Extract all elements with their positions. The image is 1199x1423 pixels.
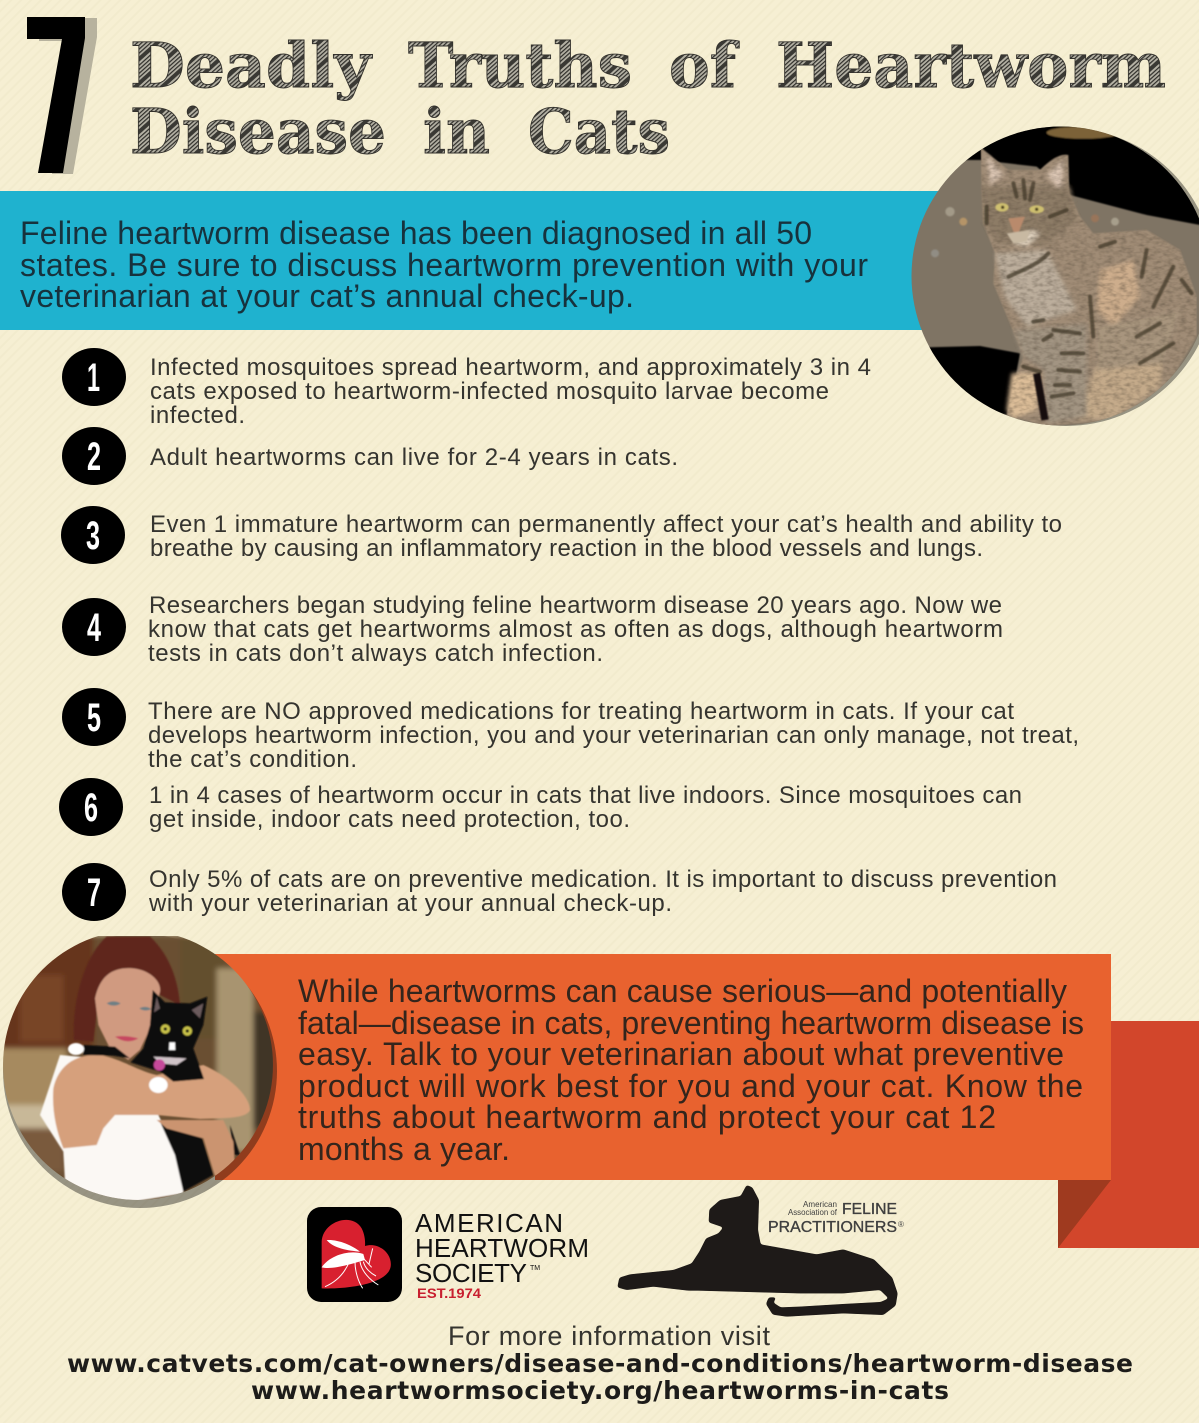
- item 2: Adult heartworms can live for 2-4 years in cats.: [150, 444, 678, 471]
- wordmark: American: [803, 1200, 837, 1209]
- intro text: veterinarian at your cat’s annual check-up.: [20, 278, 634, 314]
- wordmark: EST.1974: [417, 1285, 481, 1301]
- wordmark: [415, 1208, 589, 1301]
- callout text: months a year.: [298, 1131, 510, 1167]
- item 4: 4: [87, 606, 101, 650]
- item 5: 5: [87, 696, 101, 740]
- numbered list: [59, 348, 1079, 921]
- footer links: www.heartwormsociety.org/heartworms-in-cats: [251, 1376, 949, 1405]
- intro text: [20, 215, 868, 314]
- wordmark: HEARTWORM: [415, 1233, 589, 1263]
- item 2: 2: [87, 435, 101, 479]
- wordmark: FELINE: [842, 1201, 897, 1218]
- callout text: product will work best for you and your cat. Know the: [298, 1068, 1083, 1104]
- logo: American Heartworm Society: [307, 1207, 589, 1302]
- item 5: [62, 688, 1079, 773]
- item 1: cats exposed to heartworm-infected mosquito larvae become: [150, 378, 829, 405]
- item 1: infected.: [150, 402, 245, 429]
- item 7: with your veterinarian at your annual check-up.: [148, 890, 672, 917]
- title: Heartworm: [776, 29, 1166, 102]
- callout text: While heartworms can cause serious—and potentially: [298, 973, 1067, 1009]
- wordmark: Association of: [788, 1208, 838, 1217]
- callout text: easy. Talk to your veterinarian about what preventive: [298, 1036, 1064, 1072]
- item 3: breathe by causing an inflammatory reaction in the blood vessels and lungs.: [150, 535, 983, 562]
- title: [130, 29, 1166, 168]
- item 4: tests in cats don’t always catch infection.: [148, 640, 603, 667]
- item 5: the cat’s condition.: [148, 746, 357, 773]
- item 2: [62, 427, 678, 485]
- title: Truths: [408, 29, 632, 102]
- item 5: There are NO approved medications for treating heartworm in cats. If your cat: [148, 698, 1014, 725]
- footer links: For more information visit: [448, 1321, 770, 1351]
- item 3: Even 1 immature heartworm can permanently affect your cat’s health and ability to: [150, 511, 1062, 538]
- item 3: [61, 506, 1062, 564]
- icon: heart and mosquito: [307, 1207, 402, 1302]
- item 7: 7: [87, 871, 101, 915]
- item 6: [59, 778, 1022, 836]
- wordmark: TM: [530, 1265, 540, 1272]
- item 3: 3: [86, 514, 100, 558]
- item 6: get inside, indoor cats need protection, too.: [149, 806, 630, 833]
- wordmark: AMERICAN: [415, 1208, 563, 1238]
- callout text: fatal—disease in cats, preventing heartworm disease is: [298, 1005, 1084, 1041]
- item 1: 1: [87, 356, 100, 400]
- title: of: [669, 29, 739, 102]
- footer links: [67, 1321, 1133, 1405]
- big numeral 7: [27, 17, 97, 174]
- callout text: truths about heartworm and protect your cat 12: [298, 1099, 996, 1135]
- item 4: know that cats get heartworms almost as often as dogs, although heartworm: [148, 616, 1003, 643]
- icon: reclining cat silhouette: [617, 1185, 898, 1317]
- photo: tabby cat in circle: [905, 120, 1199, 430]
- item 4: [62, 592, 1003, 667]
- intro text: Feline heartworm disease has been diagnosed in all 50: [20, 215, 812, 251]
- intro text: states. Be sure to discuss heartworm prevention with your: [20, 247, 868, 283]
- item 7: Only 5% of cats are on preventive medication. It is important to discuss prevention: [149, 866, 1057, 893]
- item 6: 1 in 4 cases of heartworm occur in cats that live indoors. Since mosquitoes can: [149, 782, 1022, 809]
- logo: American Association of Feline Practitioners: [617, 1185, 904, 1317]
- item 1: Infected mosquitoes spread heartworm, and approximately 3 in 4: [150, 354, 871, 381]
- item 4: Researchers began studying feline heartworm disease 20 years ago. Now we: [149, 592, 1002, 619]
- panel: orange ribbon callout: [215, 954, 1199, 1248]
- title: Disease: [130, 95, 386, 168]
- wordmark: ®: [898, 1220, 904, 1229]
- wordmark: PRACTITIONERS: [768, 1219, 897, 1236]
- wordmark: [768, 1200, 904, 1236]
- photo: woman holding black cat: [0, 934, 280, 1208]
- item 1: [62, 348, 871, 429]
- item 6: 6: [84, 786, 98, 830]
- title: in: [423, 95, 490, 168]
- item 5: develops heartworm infection, you and your veterinarian can only manage, not treat,: [148, 722, 1079, 749]
- item 7: [62, 863, 1057, 921]
- panel: teal intro band: [0, 191, 960, 330]
- footer links: www.catvets.com/cat-owners/disease-and-conditions/heartworm-disease: [67, 1349, 1133, 1378]
- callout text: [298, 973, 1084, 1167]
- wordmark: SOCIETY: [415, 1258, 527, 1288]
- title: Deadly: [130, 29, 373, 102]
- title: Cats: [528, 95, 670, 168]
